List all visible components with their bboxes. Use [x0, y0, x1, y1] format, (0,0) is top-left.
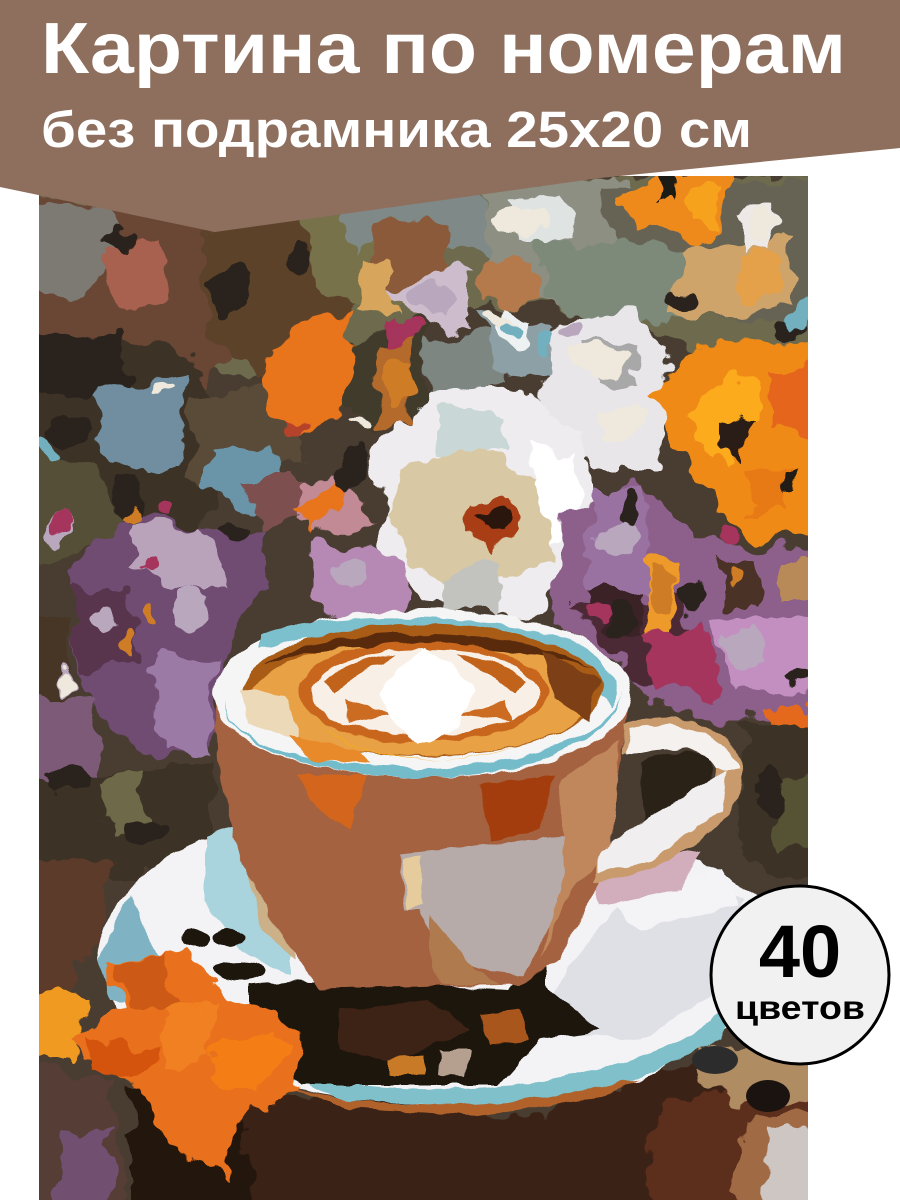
- purple flowers right: [550, 478, 808, 728]
- orange flower bottom left: [70, 950, 300, 1175]
- cup handle: [590, 718, 742, 885]
- right side foliage: [736, 720, 808, 880]
- purple flowers left: [39, 474, 412, 782]
- large orange flower right: [648, 337, 808, 548]
- lower left dark foliage: [39, 762, 218, 1200]
- saucer: [98, 825, 760, 1116]
- cup rim and latte art: [214, 610, 632, 778]
- painting: coffee cup and flowers: [39, 176, 808, 1200]
- background flowers and foliage: [39, 176, 808, 1200]
- cup body: [215, 696, 630, 990]
- table bottom: [124, 1044, 808, 1200]
- orange flower upper left: [265, 315, 415, 440]
- coffee spill on saucer: [181, 929, 600, 1085]
- header banner: [0, 0, 900, 232]
- white flowers: [370, 310, 670, 610]
- coffee beans: [692, 1046, 790, 1112]
- subtitle: без подрамника 25х20 см: [41, 101, 752, 158]
- badge: 40 colours: [711, 886, 889, 1064]
- badge label: цветов: [735, 989, 865, 1026]
- paint dabs: [40, 209, 813, 842]
- badge number: 40: [759, 910, 841, 993]
- title: Картина по номерам: [41, 9, 846, 89]
- orange flower top right: [620, 170, 790, 320]
